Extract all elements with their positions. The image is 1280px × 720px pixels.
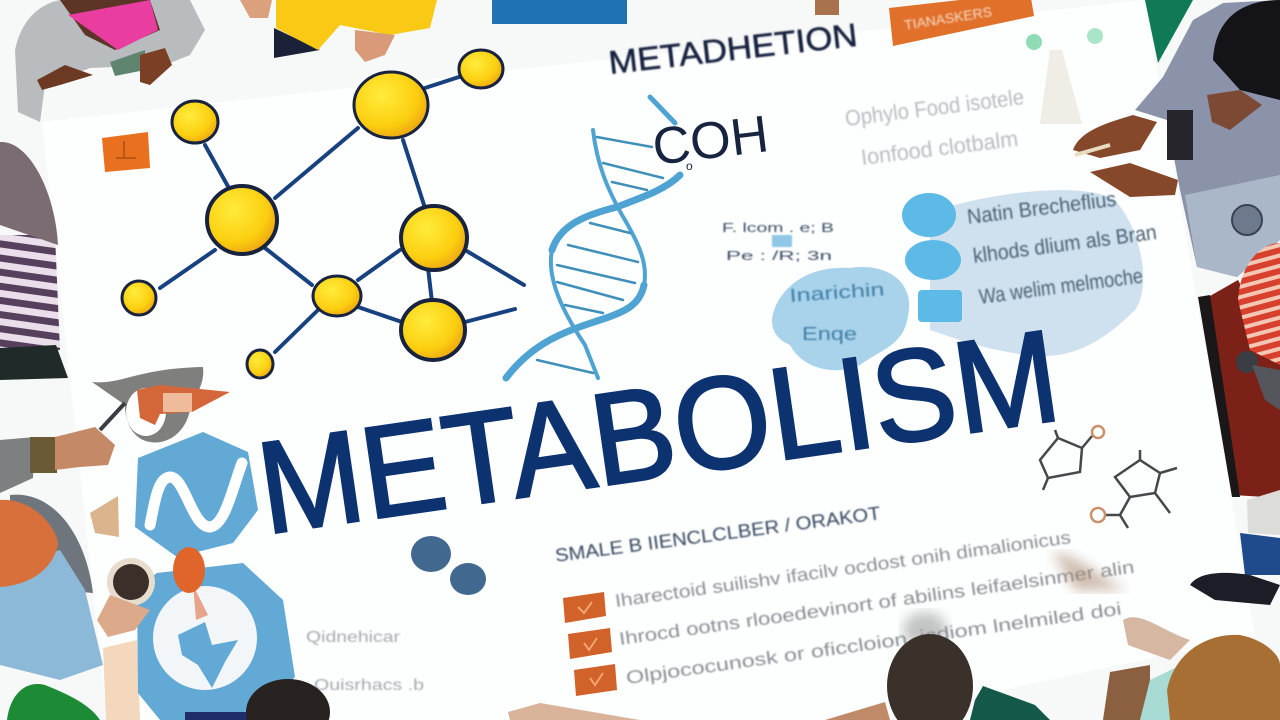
hand bottom (508, 703, 640, 720)
right top text (844, 84, 1025, 170)
orange badge: TIANASKERS (903, 3, 993, 33)
checklist: Ihrocd ootns rlooedevinort of abilins leifaelsinmer alin (618, 557, 1135, 649)
small grey note: Ouisrhacs .b (314, 677, 424, 694)
hexagon wave icon (135, 432, 258, 557)
blue cloud label: Enqe (802, 324, 857, 344)
hexagon globe icon (137, 563, 295, 720)
molecule diagram (122, 50, 524, 378)
top heading: METADHETION (607, 17, 859, 81)
small chem note: Pe : /R; 3n (726, 248, 832, 263)
person top left (15, 0, 205, 122)
paper cone and pins (1026, 28, 1103, 124)
person top yellow (274, 0, 437, 62)
small grey note (306, 629, 424, 694)
orange tag left (102, 132, 150, 172)
green panel right top (1145, 0, 1193, 63)
blurred hand right (1053, 553, 1127, 590)
blue list: Wa welim melmoche (978, 265, 1144, 309)
blue cloud label: Inarichin (789, 279, 885, 306)
blue dots (411, 536, 486, 595)
small chem note (722, 220, 834, 263)
peach band (103, 640, 140, 720)
orange pin (173, 547, 208, 620)
person top blue (492, 0, 627, 24)
person right top (1073, 0, 1280, 277)
person bottom head left (185, 679, 330, 720)
blue list (902, 188, 1158, 322)
small chem note: F. lcom . e; B (722, 220, 834, 235)
blue list: klhods dlium als Bran (972, 221, 1158, 268)
checklist: Iharectoid suilishv ifacilv ocdost onih dimalionicus (614, 527, 1072, 611)
tools in hand (92, 367, 230, 443)
chemical structures (1040, 426, 1177, 528)
beige shape (90, 496, 119, 537)
formula COH: COH (649, 105, 772, 177)
person bottom left (0, 495, 155, 680)
small grey note: Qidnehicar (306, 629, 401, 646)
person right red (1198, 243, 1280, 498)
person bottom right (1103, 617, 1280, 720)
green plant (7, 684, 100, 720)
person left striped (0, 142, 68, 380)
person right bottom boot (1190, 490, 1280, 605)
arm left (0, 427, 115, 493)
DNA helix (506, 97, 680, 378)
checklist (563, 527, 1135, 696)
blue list: Natin Brecheflius (966, 188, 1117, 229)
subheading: SMALE B IIENCLCLBER / ORAKOT (554, 503, 882, 566)
formula COH: o (686, 159, 693, 173)
blue blob (930, 190, 1143, 356)
checklist: Olpjococunosk or oficcloion, icdiom lnelmiled doi (625, 599, 1123, 688)
orange badge (889, 0, 1034, 46)
hand top yellow (240, 0, 272, 18)
person bottom centre (825, 612, 1050, 720)
hand top centre (815, 0, 839, 15)
right top text: Ionfood clotbalm (860, 126, 1019, 170)
blue cloud label (772, 267, 909, 370)
main title: METABOLISM (249, 301, 1068, 562)
right top text: Ophylo Food isotele (844, 84, 1025, 131)
